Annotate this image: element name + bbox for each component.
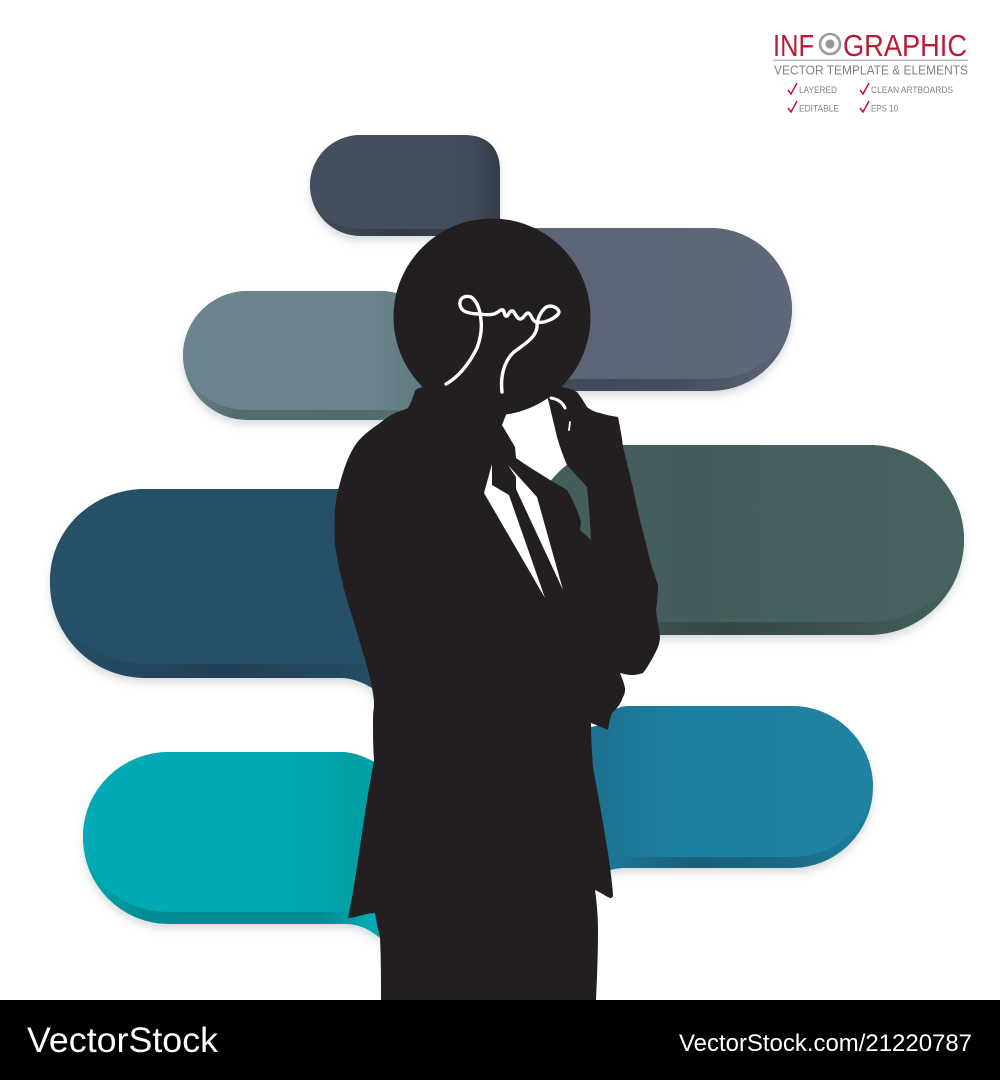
logo heading: INF (773, 28, 814, 63)
pill: navy left (50, 489, 400, 700)
pill: slate right (500, 228, 792, 391)
feature list: LAYERED (799, 85, 837, 95)
pill: blue right (580, 706, 873, 880)
feature list: EPS 10 (871, 104, 898, 114)
businessman silhouette (334, 218, 660, 1000)
logo heading (773, 28, 967, 63)
footer image id: VectorStock.com/21220787 (679, 1030, 972, 1057)
logo block (773, 28, 968, 114)
check marks (788, 83, 869, 112)
footer bar (0, 1000, 1000, 1080)
logo target icon (820, 34, 840, 54)
pill: dark green right (530, 445, 964, 635)
filament (446, 296, 559, 392)
feature list: EDITABLE (799, 104, 839, 114)
logo heading: GRAPHIC (843, 28, 967, 63)
finger highlights (551, 398, 570, 430)
shirt and tie highlights (484, 464, 563, 598)
suit body (334, 387, 660, 1000)
feature list: CLEAN ARTBOARDS (871, 85, 953, 95)
footer brand: VectorStock (27, 1021, 219, 1060)
pill: bright teal left (83, 752, 400, 945)
pill: dark charcoal top (310, 135, 500, 236)
lightbulb head (394, 218, 590, 416)
pill: grey teal left (183, 291, 444, 420)
logo rule (773, 60, 968, 61)
feature list (799, 85, 953, 114)
logo subtitle: VECTOR TEMPLATE & ELEMENTS (774, 62, 968, 78)
